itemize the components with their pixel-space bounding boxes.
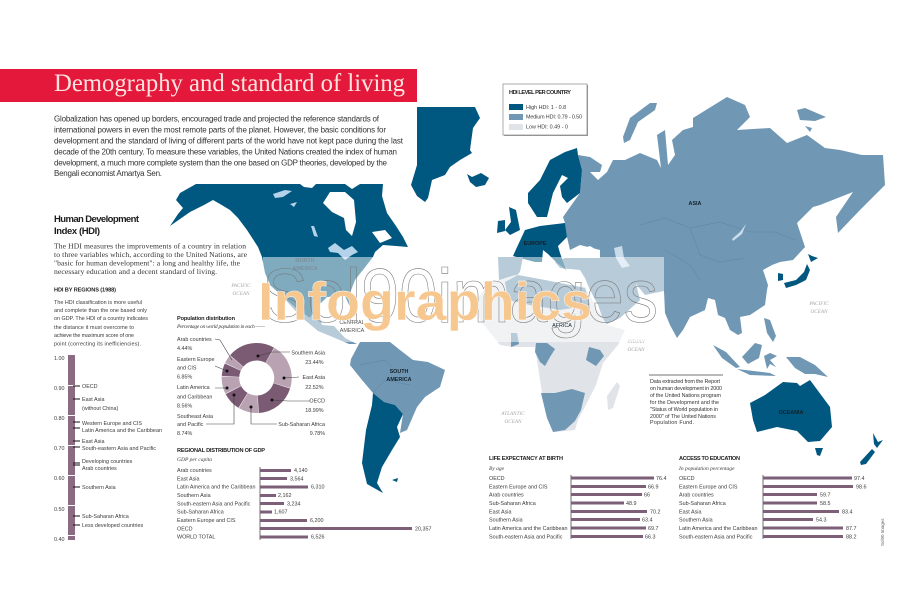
donut labels right: OECD — [309, 398, 325, 404]
intro text block: development, a much more complete system than the one based on GDP theories, developed by the — [54, 158, 388, 168]
HDI classification note: point (correcting its inefficiencies). — [54, 342, 141, 348]
map region: Ghana — [511, 333, 519, 347]
map region: Scandinavia — [528, 148, 582, 217]
HDI classification note: the distance it must overcome to — [54, 325, 134, 331]
world map: HDI level per country — [170, 97, 885, 493]
HDI region labels: South-eastern Asia and Pacific — [82, 446, 156, 452]
donut labels left: 8.56% — [177, 404, 192, 410]
life expectancy values: 69.7 — [648, 526, 658, 532]
map label: Pacific Ocean east: OCEAN — [810, 309, 828, 315]
title banner — [0, 69, 417, 102]
map region: Southeast Asia islands — [713, 318, 828, 377]
life expectancy values: 66.3 — [645, 534, 656, 540]
HDI classification note: The HDI classification is more useful — [54, 300, 142, 306]
GDP values: 3,564 — [290, 476, 304, 482]
data source note: of the United Nations program — [650, 393, 722, 399]
education row labels: South-eastern Asia and Pacific — [679, 534, 753, 540]
map label: Central America: CENTRAL — [339, 320, 365, 326]
intro text block: international powers in even the most remote parts of the planet. However, the basic conditions for — [54, 126, 386, 134]
education values: 54.3 — [816, 518, 826, 524]
life expectancy row labels: East Asia — [489, 509, 511, 515]
education row labels: East Asia — [679, 509, 701, 515]
donut labels left: Arab countries — [177, 337, 212, 343]
donut labels right: 18.99% — [305, 408, 324, 414]
donut labels left: 4.44% — [177, 346, 192, 352]
map region: South America medium HDI — [350, 342, 445, 433]
map label: Pacific Ocean west: OCEAN — [232, 291, 250, 297]
map detail: Caspian Sea — [614, 246, 630, 268]
HDI region labels: (without China) — [82, 406, 118, 412]
HDI region labels: Arab countries — [82, 466, 117, 472]
GDP row labels: Eastern Europe and CIS — [177, 518, 236, 524]
GDP values: 2,162 — [278, 493, 292, 499]
life expectancy row labels: South-eastern Asia and Pacific — [489, 534, 563, 540]
map region: Japan — [784, 254, 818, 288]
map detail: country borders — [360, 218, 795, 420]
data source note: for the Development and the — [650, 400, 719, 406]
life expectancy row labels: Eastern Europe and CIS — [489, 484, 548, 490]
panel: population distribution — [176, 316, 325, 437]
HDI scale bar — [68, 355, 75, 540]
life expectancy values: 70.2 — [650, 509, 660, 515]
HDI region labels: Less developed countries — [82, 523, 143, 529]
education values: 87.7 — [846, 526, 856, 532]
map region: Central Africa medium HDI — [535, 343, 555, 366]
map label: South America: AMERICA — [386, 377, 412, 383]
education row labels: Latin America and the Caribbean — [679, 526, 758, 532]
education values: 88.2 — [846, 534, 856, 540]
map detail: northern lakes — [273, 190, 318, 237]
map detail: Lake Baikal — [732, 224, 746, 241]
legend item: high: High HDI: 1 - 0.8 — [526, 105, 566, 111]
donut labels right: Sub-Saharan Africa — [278, 422, 325, 428]
map label: Asia: ASIA — [689, 201, 702, 207]
HDI scale values: 0.90 — [54, 386, 64, 392]
HDI classification note: achieve the maximum score of one — [54, 333, 134, 339]
map region: Madagascar — [607, 382, 620, 410]
HDI description: to three variables which, according to the United Nations, are — [54, 250, 248, 259]
HDI scale values: 0.50 — [54, 507, 64, 513]
map region: North Africa medium HDI — [505, 275, 590, 310]
education values: 59.7 — [820, 493, 830, 499]
map region: Ireland — [497, 220, 505, 233]
map region: Iberia — [498, 257, 523, 282]
watermark text: sol90images outline: Sol90images — [262, 254, 658, 339]
legend: HDI level per country — [503, 84, 588, 136]
life expectancy values: 63.4 — [642, 518, 652, 524]
subheading: GDP: GDP per capita — [177, 457, 212, 463]
data source note: "Status of World population in — [650, 407, 718, 413]
watermark panel — [263, 257, 664, 342]
donut labels right: 23.44% — [305, 360, 324, 366]
heading: Human Development Index: Index (HDI) — [54, 226, 100, 237]
donut labels left: 6.85% — [177, 374, 192, 380]
GDP values: 3,234 — [287, 501, 300, 507]
intro text block: development and the standard of living of different parts of the world have not kept pace during the last — [54, 136, 404, 146]
education values: 83.4 — [842, 509, 852, 515]
HDI description: The HDI measures the improvements of a country in relation — [54, 242, 246, 250]
GDP values: 6,200 — [310, 518, 324, 524]
data source note: 2000" of The United Nations — [650, 414, 716, 420]
map region: Tasmania — [815, 448, 823, 456]
map region: Arctic islands — [797, 108, 826, 132]
map region: Korea — [778, 273, 783, 281]
education values: 58.5 — [820, 501, 830, 507]
map region: Greenland — [411, 107, 480, 202]
map detail: Hudson Bay — [323, 192, 356, 236]
map label: Atlantic Ocean south: ATLANTIC — [500, 411, 525, 417]
HDI description: "basic for human development": a long and healthy life, the — [54, 258, 241, 268]
heading: Human Development Index: Human Development — [54, 214, 140, 225]
intro text block: Globalization has opened up borders, encouraged trade and projected the reference standards of — [54, 114, 380, 124]
donut labels right: 22.52% — [305, 385, 324, 391]
watermark text: infographics: Infographics — [258, 272, 592, 332]
life expectancy row labels: Latin America and the Caribbean — [489, 526, 568, 532]
life expectancy row labels: Sub-Saharan Africa — [489, 501, 536, 507]
data source note: Data extracted from the Report — [650, 379, 720, 385]
donut leaders — [206, 339, 310, 424]
life expectancy bar chart — [571, 475, 654, 539]
life expectancy row labels: OECD — [489, 476, 505, 482]
donut labels left: Eastern Europe — [177, 357, 214, 363]
data source note: on human development in 2000 — [650, 386, 722, 392]
donut labels left: and Pacific — [177, 422, 204, 428]
HDI region labels: East Asia — [82, 439, 104, 445]
subheading: education: In population percentage — [678, 466, 735, 472]
GDP row labels: Arab countries — [177, 468, 212, 474]
map region: western Europe — [513, 223, 567, 270]
education values: 97.4 — [854, 476, 864, 482]
legend title: HDI LEVEL PER COUNTRY — [509, 90, 571, 96]
map label: Central America: AMERICA — [340, 328, 365, 334]
map region: Africa — [476, 275, 625, 432]
map detail: Black Sea — [576, 246, 600, 258]
map label: Indian Ocean: INDIAN — [626, 339, 645, 345]
map region: southern cone — [362, 393, 403, 493]
HDI region labels: Developing countries — [82, 459, 133, 465]
data source note: Population Fund. — [650, 420, 694, 426]
map region: Southern Africa — [541, 389, 585, 432]
donut labels left: Southeast Asia — [177, 414, 213, 420]
HDI region labels: Southern Asia — [82, 485, 116, 491]
GDP values: 6,310 — [311, 485, 324, 491]
donut labels right: Southern Asia — [291, 350, 325, 356]
map region: Falkland — [392, 478, 398, 482]
map region: United States — [262, 257, 373, 318]
heading: education: ACCESS TO EDUCATION — [679, 456, 740, 462]
donut labels left: Latin America — [177, 385, 210, 391]
donut chart — [220, 341, 294, 415]
life expectancy values: 48.9 — [626, 501, 636, 507]
GDP row labels: Sub-Saharan Africa — [177, 510, 224, 516]
map label: South America: SOUTH — [390, 369, 409, 375]
GDP row labels: East Asia — [177, 476, 199, 482]
panel: life expectancy at birth — [489, 456, 668, 540]
donut labels right: East Asia — [303, 375, 325, 381]
heading: GDP: REGIONAL DISTRIBUTION OF GDP — [177, 448, 265, 454]
HDI scale values: 0.40 — [54, 537, 64, 543]
map region: Kenya — [586, 347, 604, 366]
education row labels: Sub-Saharan Africa — [679, 501, 726, 507]
education row labels: Eastern Europe and CIS — [679, 484, 738, 490]
education values: 98.6 — [856, 484, 866, 490]
HDI scale values: 0.70 — [54, 446, 64, 452]
map label: Pacific Ocean east: PACIFIC — [808, 301, 829, 307]
life expectancy values: 66 — [644, 493, 650, 499]
map region: Novaya Zemlya — [623, 103, 657, 143]
heading: population distribution: Population distribution — [177, 316, 236, 322]
HDI classification note: on GDP. The HDI of a country indicates — [54, 316, 148, 322]
GDP values: 20,357 — [415, 526, 432, 532]
HDI scale values: 1.00 — [54, 356, 64, 362]
map label: Oceania: OCEANIA — [779, 410, 804, 416]
GDP values: 1,607 — [274, 510, 288, 516]
HDI region labels: Latin America and the Caribbean — [82, 428, 162, 434]
education row labels: OECD — [679, 476, 695, 482]
HDI region labels: Sub-Saharan Africa — [82, 514, 129, 520]
subheading: population distribution: Percentage on world population in each —— — [176, 324, 265, 330]
map detail: Great Lakes — [328, 243, 358, 260]
HDI scale values: 0.80 — [54, 416, 64, 422]
HDI classification note: and complete than the one based only — [54, 308, 147, 314]
data source note — [649, 375, 723, 426]
GDP bar chart — [260, 467, 412, 540]
map region: Eurasia — [555, 97, 885, 338]
donut labels left: and CIS — [177, 366, 197, 372]
map label: North America: AMERICA — [292, 266, 318, 272]
map label: Atlantic Ocean south: OCEAN — [504, 419, 522, 425]
panel: HDI by regions — [54, 288, 164, 543]
GDP row labels: WORLD TOTAL — [177, 535, 215, 541]
life expectancy values: 76.4 — [656, 476, 666, 482]
HDI region labels: Western Europe and CIS — [82, 421, 142, 427]
education row labels: Arab countries — [679, 493, 714, 499]
HDI scale values: 0.60 — [54, 476, 64, 482]
heading: life expectancy: LIFE EXPECTANCY AT BIRTH — [489, 456, 563, 462]
life expectancy row labels: Southern Asia — [489, 518, 523, 524]
life expectancy row labels: Arab countries — [489, 493, 524, 499]
map region: Australia — [750, 380, 832, 442]
GDP row labels: Latin America and the Caribbean — [177, 485, 256, 491]
legend item: low: Low HDI: 0.49 - 0 — [526, 124, 568, 130]
map label: Indian Ocean: OCEAN — [627, 347, 645, 353]
map label: North America: NORTH — [295, 258, 315, 264]
intro text block: Bengali economist Amartya Sen. — [54, 169, 162, 178]
map label: Pacific Ocean west: PACIFIC — [230, 283, 251, 289]
donut labels left: and Caribbean — [177, 394, 212, 400]
GDP values: 6,526 — [311, 535, 324, 541]
heading: HDI by regions: HDI BY REGIONS (1988) — [54, 288, 116, 294]
map region: Great Britain — [505, 207, 520, 235]
education row labels: Southern Asia — [679, 518, 713, 524]
map region: Mexico and Central America — [283, 297, 357, 344]
HDI region labels: East Asia — [82, 397, 104, 403]
map region: New Zealand — [860, 433, 883, 465]
title: Demography and standard of living — [54, 70, 405, 97]
GDP values: 4,140 — [294, 468, 308, 474]
GDP row labels: OECD — [177, 526, 193, 532]
map region: Alaska and Canada — [170, 184, 408, 257]
image credit: Sol90 Images — [880, 518, 885, 546]
donut labels left: 8.74% — [177, 431, 192, 437]
intro text block: decade of the 20th century. To measure these variables, the United Nations created the index of human — [54, 148, 397, 156]
map label: Europe: EUROPE — [524, 241, 547, 247]
life expectancy values: 66.9 — [648, 484, 658, 490]
education bar chart — [763, 475, 853, 539]
GDP row labels: Southern Asia — [177, 493, 211, 499]
HDI region ticks — [73, 386, 80, 525]
panel: access to education — [678, 456, 868, 540]
donut labels right: 9.78% — [310, 431, 325, 437]
subheading: life expectancy: By age — [489, 466, 505, 472]
HDI description: necessary education and a decent standard of living. — [54, 267, 217, 276]
HDI region labels: OECD — [82, 384, 98, 390]
panel: regional distribution of GDP — [177, 448, 433, 541]
legend item: medium: Medium HDI: 0.79 - 0.50 — [526, 114, 582, 120]
map region: Iceland — [467, 173, 489, 187]
GDP row labels: South-eastern Asia and Pacific — [177, 501, 251, 507]
map label: Africa: AFRICA — [552, 323, 572, 329]
